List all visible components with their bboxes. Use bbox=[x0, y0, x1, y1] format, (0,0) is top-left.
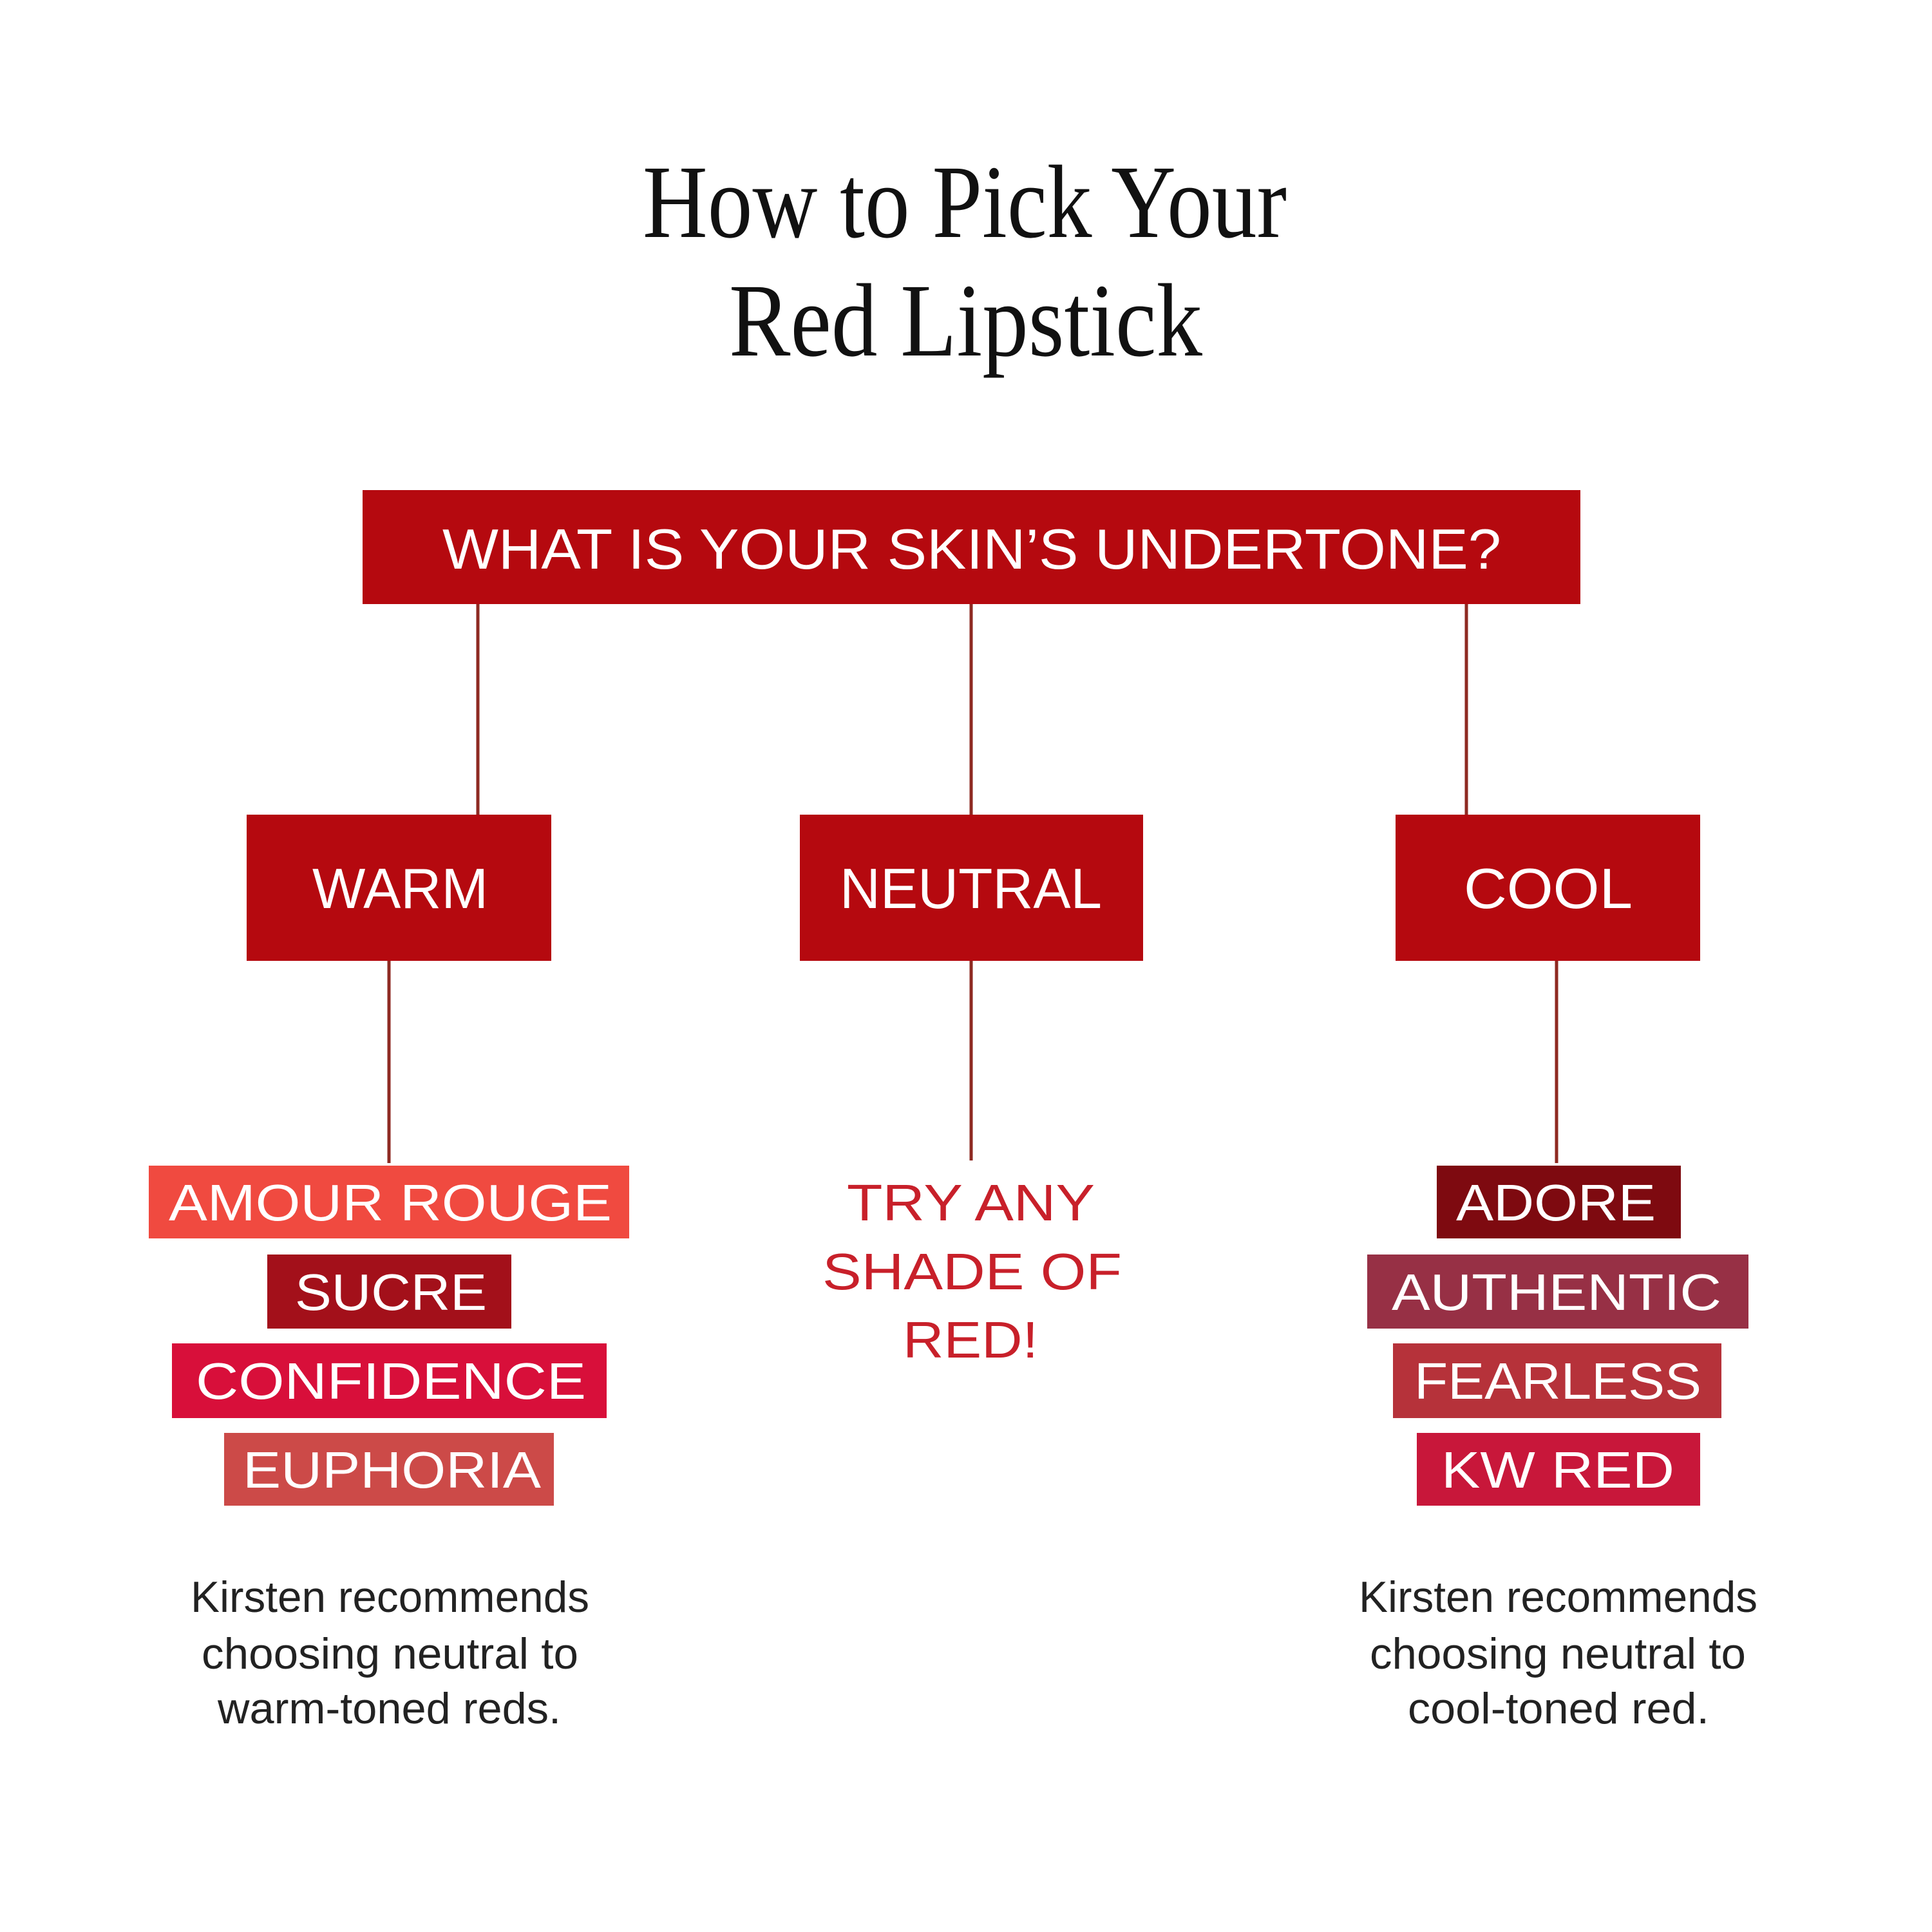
warm shades list: CONFIDENCE bbox=[196, 1352, 586, 1410]
neutral advice text: SHADE OF bbox=[822, 1243, 1122, 1300]
cool shades list bbox=[1367, 1166, 1748, 1506]
neutral advice text: TRY ANY bbox=[847, 1174, 1095, 1231]
cool recommendation text: Kirsten recommends bbox=[1359, 1573, 1757, 1622]
cool shades list: FEARLESS bbox=[1414, 1352, 1701, 1410]
title bbox=[643, 145, 1287, 379]
box: cool bbox=[1396, 815, 1700, 961]
warm recommendation text bbox=[191, 1573, 589, 1733]
question box bbox=[363, 490, 1580, 604]
warm recommendation text: choosing neutral to bbox=[202, 1629, 578, 1678]
question box: WHAT IS YOUR SKIN’S UNDERTONE? bbox=[442, 517, 1501, 581]
box: warm: WARM bbox=[312, 857, 488, 920]
warm shades list: AMOUR ROUGE bbox=[169, 1174, 612, 1231]
cool shades list: ADORE bbox=[1456, 1174, 1656, 1231]
title: Red Lipstick bbox=[729, 263, 1202, 379]
box: neutral bbox=[800, 815, 1143, 961]
warm shades list: EUPHORIA bbox=[243, 1441, 542, 1499]
cool recommendation text bbox=[1359, 1573, 1757, 1733]
warm shades list bbox=[149, 1166, 629, 1506]
warm recommendation text: Kirsten recommends bbox=[191, 1573, 589, 1622]
cool recommendation text: cool-toned red. bbox=[1408, 1684, 1709, 1733]
warm recommendation text: warm-toned reds. bbox=[217, 1684, 561, 1733]
connector lines bbox=[389, 604, 1557, 1163]
neutral advice text bbox=[822, 1174, 1122, 1368]
warm shades list: SUCRE bbox=[295, 1264, 487, 1321]
box: warm bbox=[247, 815, 551, 961]
box: cool: COOL bbox=[1464, 857, 1633, 920]
title: How to Pick Your bbox=[643, 145, 1287, 260]
box: neutral: NEUTRAL bbox=[840, 857, 1102, 920]
neutral advice text: RED! bbox=[903, 1311, 1038, 1368]
cool shades list: AUTHENTIC bbox=[1392, 1264, 1721, 1321]
cool recommendation text: choosing neutral to bbox=[1370, 1629, 1746, 1678]
cool shades list: KW RED bbox=[1441, 1441, 1674, 1499]
